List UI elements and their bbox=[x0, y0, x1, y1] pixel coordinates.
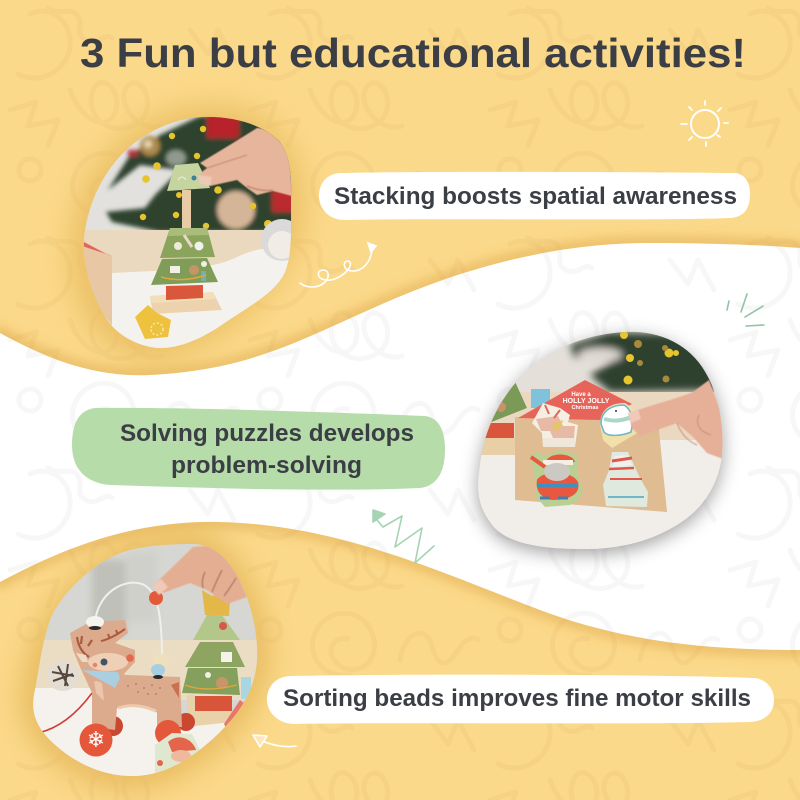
icon: green dashes bbox=[727, 294, 764, 326]
blurred christmas tree backdrop bbox=[106, 114, 295, 232]
roof lettering: Christmas bbox=[572, 405, 598, 411]
wire arc bbox=[95, 583, 162, 660]
reindeer head bbox=[70, 620, 135, 682]
toy tree bbox=[182, 590, 245, 726]
white wave band bbox=[0, 240, 800, 660]
box and card bbox=[241, 677, 251, 699]
penguin piece bbox=[600, 403, 641, 448]
table and snow bbox=[491, 392, 718, 440]
santa piece bbox=[529, 450, 583, 507]
table and snow bbox=[80, 230, 295, 290]
snowman piece bbox=[603, 452, 648, 507]
star block bbox=[135, 305, 171, 339]
pill: sorting label bbox=[267, 675, 774, 724]
photo: puzzle board bbox=[478, 332, 722, 549]
box at left bbox=[82, 241, 112, 325]
white cloth bbox=[25, 688, 230, 780]
glass ornament bbox=[261, 219, 291, 261]
photo glow bottom bbox=[20, 530, 270, 790]
red string bbox=[38, 693, 92, 733]
pine cone bbox=[47, 661, 79, 691]
wave shadow bbox=[0, 243, 800, 650]
bandana bbox=[82, 670, 120, 688]
pill: stacking label bbox=[319, 172, 750, 220]
roof lettering: Have a bbox=[571, 392, 591, 398]
reindeer piece bbox=[532, 403, 578, 447]
pole bbox=[182, 190, 191, 230]
tree decorations bbox=[161, 177, 207, 281]
blurred tree backdrop bbox=[570, 332, 730, 392]
pill: sorting label: Sorting beads improves fine motor skills bbox=[283, 685, 751, 712]
arrow: small white left bbox=[253, 735, 296, 747]
hand bbox=[628, 380, 724, 459]
arrow: green zigzag bbox=[373, 510, 434, 563]
lights bbox=[620, 331, 679, 384]
roof bbox=[518, 380, 632, 420]
window backdrop bbox=[90, 558, 130, 628]
red block bbox=[166, 285, 203, 300]
stacking base bbox=[150, 292, 222, 314]
pill: puzzle label: Solving puzzles develops bbox=[120, 420, 414, 447]
arrow: curly white bbox=[300, 243, 376, 287]
rear wheels bbox=[108, 716, 123, 736]
roof lettering: HOLLY JOLLY bbox=[563, 398, 610, 405]
reindeer body bbox=[80, 667, 182, 730]
title: 3 Fun but educational activities! bbox=[80, 30, 746, 76]
background toy tree bbox=[491, 383, 527, 422]
table bbox=[25, 640, 265, 700]
pill: puzzle label bbox=[72, 408, 445, 490]
pill: puzzle label: problem-solving bbox=[171, 452, 362, 479]
photo glow top bbox=[70, 104, 305, 362]
photo: bead maze bbox=[25, 540, 265, 780]
hand bbox=[198, 128, 292, 196]
wheels bbox=[80, 724, 112, 756]
tree lights bbox=[140, 126, 272, 229]
santa piece bbox=[155, 733, 200, 775]
hand bbox=[152, 545, 247, 604]
board bbox=[515, 417, 667, 512]
icon: snowflake wheel: ❄ bbox=[87, 728, 105, 753]
photo: stacking tree bbox=[84, 116, 292, 348]
photo shadow: puzzle bbox=[478, 337, 722, 554]
beads bbox=[86, 616, 104, 628]
pill: stacking label: Stacking boosts spatial awareness bbox=[334, 183, 737, 210]
tree tiers bbox=[151, 258, 218, 285]
icon: sun bbox=[681, 101, 728, 146]
roof lettering bbox=[563, 392, 610, 411]
